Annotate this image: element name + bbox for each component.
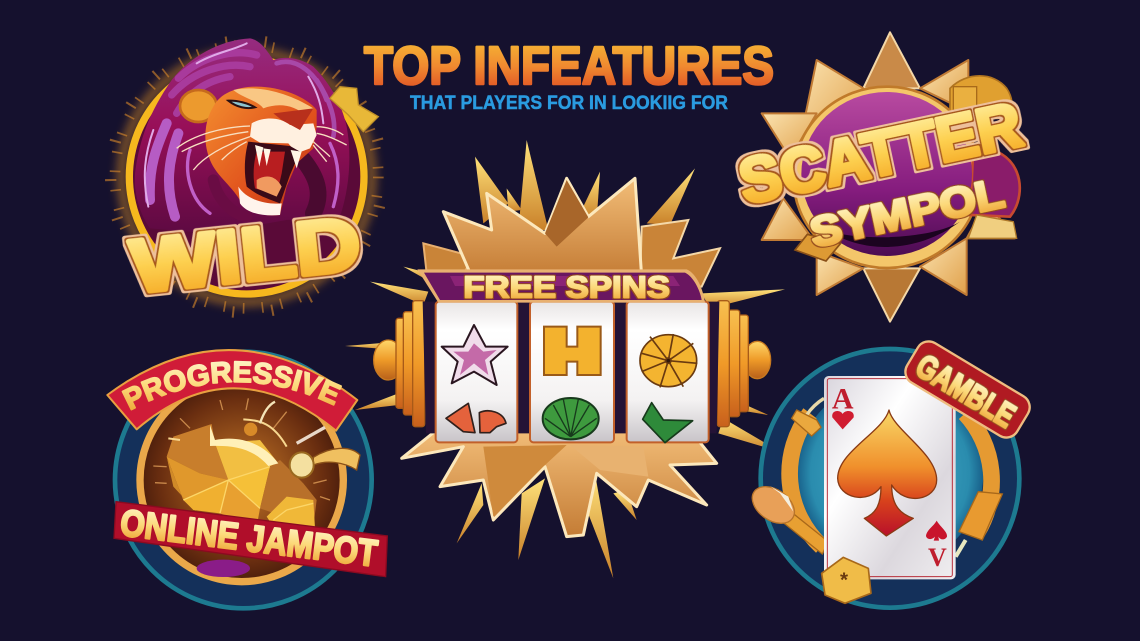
badge: gamble card (745, 337, 1034, 608)
free spins label: FREE SPINS (463, 270, 670, 304)
teal disc (115, 352, 372, 608)
badge: wild lion (111, 38, 383, 313)
subtitle: THAT PLAYERS FOR IN LOOKIIG FOR (410, 93, 728, 114)
badge: scatter symbol (733, 32, 1028, 322)
main starburst bottom (402, 430, 717, 537)
symbol label: SYMPOL (806, 169, 1008, 256)
fangs and chin (255, 145, 302, 168)
online jackpot label: ONLINE JAMPOT (118, 501, 380, 574)
hex coin (822, 557, 871, 603)
teal disc (761, 349, 1019, 608)
symbol: red shapes (446, 403, 506, 433)
symbol: green check (643, 403, 693, 443)
purple disc (801, 92, 972, 256)
symbol: flower (640, 334, 697, 387)
ring (793, 87, 980, 268)
inner blue glow (797, 380, 983, 567)
reel 3 (627, 302, 709, 442)
progressive ribbon (106, 349, 358, 432)
coin (950, 76, 1012, 118)
fan (968, 215, 1017, 238)
reel 2 (530, 302, 614, 442)
wild label: WILD (127, 201, 364, 309)
left gold cap and knob (374, 301, 425, 427)
muzzle (250, 119, 317, 153)
face (205, 87, 317, 215)
title: TOP INFEATURES (364, 36, 774, 96)
gold ring (129, 59, 364, 294)
magenta gem (197, 560, 250, 577)
free spins banner (417, 269, 705, 304)
right scroll (956, 492, 1002, 557)
hex coin: * (840, 569, 849, 592)
sun star (762, 32, 1015, 322)
ear (180, 90, 217, 122)
scatter label: SCATTER (733, 90, 1028, 218)
top heart (832, 411, 854, 429)
mane (135, 38, 349, 233)
badge: progressive jackpot (106, 349, 388, 611)
playing card (824, 376, 956, 579)
open mouth (245, 142, 300, 203)
reel housing (423, 302, 719, 433)
bottom corner inverted A: V (928, 543, 947, 572)
bottom spade (926, 521, 947, 541)
symbol: letter H (544, 327, 601, 375)
gamble label: GAMBLE (909, 348, 1021, 435)
reel 1 (436, 302, 517, 442)
top corner A: A (832, 383, 854, 416)
gamble tag (901, 337, 1034, 442)
whiskers (177, 126, 347, 170)
gold ring and brown dial (140, 378, 343, 582)
right gold cap and knob (717, 301, 771, 427)
upper-left cuff (792, 410, 821, 436)
gold key (290, 427, 360, 478)
main starburst top (443, 178, 642, 277)
online jackpot ribbon (114, 501, 387, 577)
back starburst (423, 243, 473, 280)
gold gem (167, 402, 317, 528)
outer spikes (345, 140, 785, 578)
symbol: green leaf (543, 398, 599, 439)
torch (745, 479, 828, 554)
sun rays (111, 41, 383, 313)
ribbon (330, 87, 378, 132)
forehead highlight (233, 88, 313, 117)
orb right edge (970, 148, 1020, 217)
progressive label: PROGRESSIVE (122, 360, 342, 410)
symbol: star (442, 325, 508, 385)
dial ticks (153, 398, 330, 500)
badge: free spins slot machine (345, 140, 785, 578)
eye (228, 101, 255, 108)
gold ring arcs (790, 398, 992, 547)
large spade (838, 410, 937, 536)
cuff (795, 234, 841, 261)
